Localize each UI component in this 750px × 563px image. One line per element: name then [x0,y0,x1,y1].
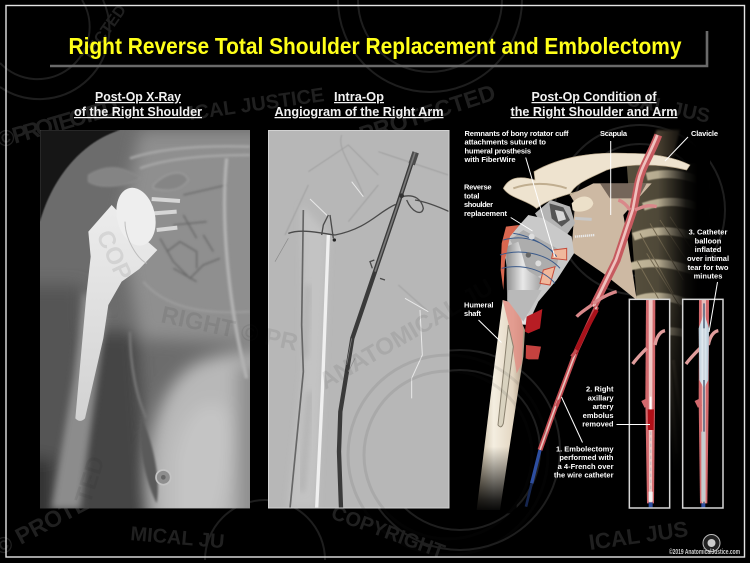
humerus bright edge [317,235,328,508]
inset frame [683,299,723,508]
watermark text on background: ICAL JUS [587,516,690,555]
watermark text on background: COPYRIGHT [328,502,448,563]
shadow beneath breast edge [140,418,158,503]
label: embolectomy: 1. Embolectomy [556,444,614,453]
label: catheter balloon: inflated [695,245,722,254]
humeral implant [75,205,157,421]
artery upper [593,135,658,307]
label: catheter balloon: over intimal [687,254,729,263]
inset: balloon catheter [683,299,723,508]
label: scapula: Scapula [600,129,628,138]
watermark text on background: ICAL JUSTICE [188,84,326,125]
label: reverse total shoulder replacement: total [464,191,480,200]
inset: embolus removed [629,299,670,508]
label: remnants: humeral prosthesis [464,146,531,155]
label: remnants: Remnants of bony rotator cuff [464,129,569,138]
label: embolus removed: artery [593,402,614,411]
panel: angiogram [268,130,449,508]
labels [464,129,729,480]
label: reverse total shoulder replacement: Reverse [464,183,492,192]
illustration: shoulder and arm [470,127,723,513]
rotator cuff remnants [501,225,519,290]
heading: x-ray: of the Right Shoulder [74,105,202,119]
watermark text on background: TECTED [79,2,130,64]
heading: angiogram: Intra-Op [334,90,384,104]
label: embolectomy: the wire catheter [554,471,614,480]
heading: x-ray: Post-Op X-Ray [95,90,181,104]
acromion and clavicle [503,153,690,208]
watermark overlay on panels: RIGHT © PR [159,301,300,357]
label: reverse total shoulder replacement: replacement [464,209,508,218]
label: embolus removed: 2. Right [586,385,614,394]
inset frame [629,299,670,508]
label: remnants: with FiberWire [464,155,516,164]
label: reverse total shoulder replacement: shoulder [464,200,493,209]
watermark overlay on panels [70,226,548,555]
label: embolus removed: embolus [583,411,614,420]
label: catheter balloon: minutes [694,272,722,281]
inset vessel [645,299,655,503]
chest and ribs [500,128,710,448]
main vessel [339,152,415,508]
label: catheter balloon: balloon [695,236,722,245]
balloon [699,313,709,388]
panel: x-ray [40,130,250,508]
embolus [648,409,654,430]
humeral shaft bone [52,292,107,508]
inset vessel [699,299,709,503]
scapula [570,183,652,300]
panel frames [268,130,449,508]
screws [575,235,595,237]
heading: post-op condition: Post-Op Condition of [532,90,657,104]
label: humeral shaft: Humeral [464,300,494,309]
bleeding muscle stumps [525,309,542,333]
copyright logo [669,534,740,556]
watermark overlay on panels: TED [70,453,111,507]
label: embolus removed: axillary [588,393,614,402]
soft tissue tones [120,132,273,345]
watermark overlay on panels: ANATOMICAL JU [314,274,498,395]
watermark text on background: MICAL JU [130,523,225,553]
branch vessels [288,196,449,280]
logo seal [703,534,720,552]
glenosphere implant [535,200,575,235]
artery with catheter [540,307,597,450]
scapula texture [160,185,227,282]
white artefacts [310,182,428,398]
watermark overlay on panels: COP [91,226,137,285]
watermark text on background: CAL JUS [624,88,712,128]
soft tissue relief [285,135,448,312]
label: clavicle: Clavicle [691,129,718,138]
label: embolectomy: performed with [559,453,614,462]
heading: angiogram: Angiogram of the Right Arm [274,105,444,119]
label: humeral shaft: shaft [464,309,482,318]
leader lines [478,137,718,442]
fiberwire sutures [500,233,560,283]
humeral cup implant [503,215,574,323]
watermark text on background: © PROTECTED [334,79,499,155]
heading: post-op condition: the Right Shoulder and Arm [510,105,678,119]
title [50,31,707,66]
label: catheter balloon: tear for two [688,263,729,272]
clavicle and acromion [130,146,250,168]
label: embolus removed: removed [582,420,614,429]
screws [152,199,180,230]
label: embolectomy: a 4-French over [558,462,614,471]
nipple marker [156,470,171,485]
label: remnants: attachments sutured to [464,138,546,147]
humerus dark edge [290,210,303,508]
black wedge outside skin [40,130,120,222]
title text: Right Reverse Total Shoulder Replacement and Embolectomy [68,33,682,59]
label: catheter balloon: 3. Catheter [689,228,727,237]
glenosphere [116,188,156,242]
title underline bracket [50,31,707,66]
arm: humerus and catheterised artery [470,290,597,513]
